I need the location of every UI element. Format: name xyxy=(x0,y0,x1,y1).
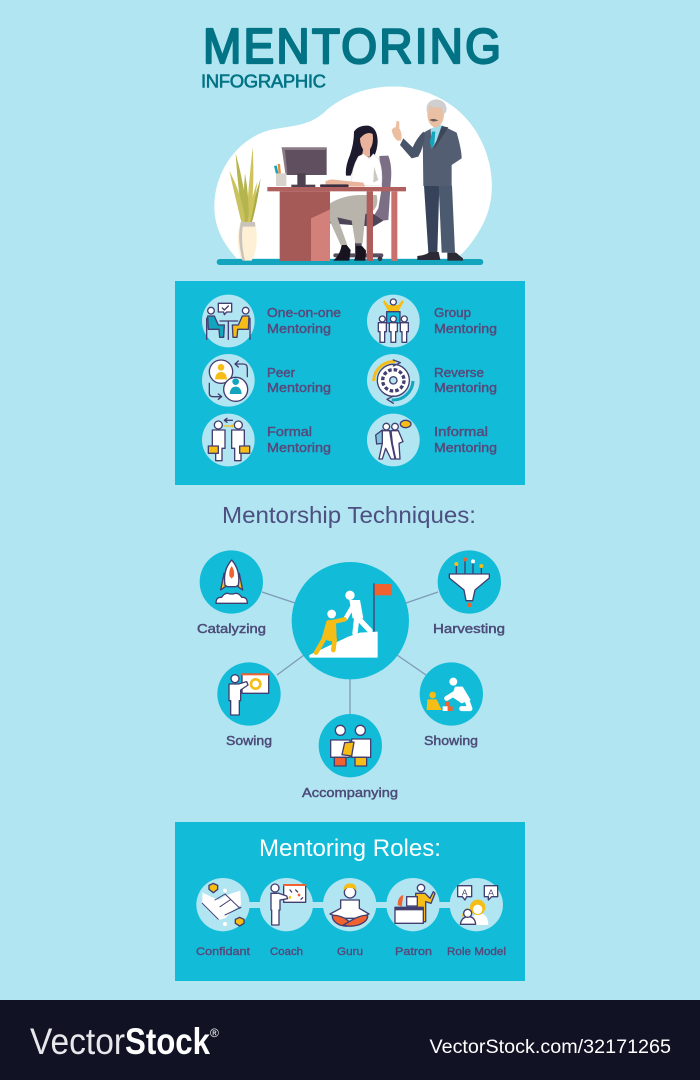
panel background xyxy=(175,822,525,981)
icon: one-on-one xyxy=(202,295,255,347)
connector lines xyxy=(262,592,438,714)
hero illustration: mentor and mentee at desk xyxy=(214,86,492,265)
panel: mentoring roles xyxy=(175,822,525,981)
icon: confidant handshake xyxy=(196,878,250,931)
icon: harvesting funnel xyxy=(438,550,501,614)
brand logo: Stock: Stock xyxy=(125,1021,210,1062)
label: one-on-one: One-on-one xyxy=(267,305,341,320)
white blob backdrop xyxy=(214,86,492,258)
mentor man standing xyxy=(392,99,463,261)
brand logo: Vector: Vector xyxy=(30,1021,125,1062)
icons group xyxy=(202,295,420,466)
label: harvesting: Harvesting xyxy=(433,621,505,636)
label: group: Mentoring xyxy=(434,321,497,336)
label: catalyzing: Catalyzing xyxy=(197,621,266,636)
panel background xyxy=(175,281,525,485)
label: one-on-one: Mentoring xyxy=(267,321,331,336)
panel: mentoring types xyxy=(175,281,525,485)
label: formal: Mentoring xyxy=(267,440,331,455)
footer bar xyxy=(0,1000,700,1080)
desk xyxy=(267,187,406,261)
icon: role model xyxy=(450,878,503,931)
label: informal: Mentoring xyxy=(434,440,497,455)
icon: accompanying xyxy=(319,714,382,777)
icon: coach xyxy=(260,878,313,931)
label: confidant: Confidant xyxy=(196,946,250,958)
label: sowing: Sowing xyxy=(226,733,272,748)
label: reverse: Reverse xyxy=(434,365,484,380)
ground line xyxy=(217,259,483,265)
icon: catalyzing rocket xyxy=(200,550,263,614)
label: patron: Patron xyxy=(395,946,432,958)
icon: peer xyxy=(202,354,255,407)
potted plant xyxy=(229,147,261,261)
label: informal: Informal xyxy=(434,424,488,439)
label: guru: Guru xyxy=(337,946,363,958)
title: MENTORING xyxy=(203,20,503,74)
connector bar xyxy=(223,902,477,908)
label: formal: Formal xyxy=(267,424,312,439)
icon: informal xyxy=(367,414,420,466)
label: peer: Mentoring xyxy=(267,380,331,395)
hub diagram: techniques xyxy=(197,550,505,800)
footer background xyxy=(0,1000,700,1080)
heading: mentorship techniques: Mentorship Techniques: xyxy=(222,502,476,528)
icon: sowing xyxy=(217,662,281,726)
icon: formal xyxy=(202,414,255,466)
label: reverse: Mentoring xyxy=(434,380,497,395)
icon: role model: A xyxy=(488,887,494,897)
icon: patron xyxy=(386,878,440,931)
label: showing: Showing xyxy=(424,733,478,748)
subtitle: INFOGRAPHIC xyxy=(201,70,326,92)
icon: showing xyxy=(420,662,483,726)
icon: reverse xyxy=(367,354,420,407)
heading: mentoring roles: Mentoring Roles: xyxy=(259,835,441,862)
registered mark: ® xyxy=(210,1026,219,1040)
label: coach: Coach xyxy=(270,946,303,958)
icon: role model: A xyxy=(462,887,468,897)
icon: guru xyxy=(323,878,376,931)
label: role model: Role Model xyxy=(447,946,506,958)
icon: group xyxy=(367,295,420,347)
woman seated xyxy=(320,126,382,261)
label: group: Group xyxy=(434,305,471,320)
office chair xyxy=(327,156,391,261)
computer monitor xyxy=(282,147,327,187)
label: peer: Peer xyxy=(267,365,296,380)
label: accompanying: Accompanying xyxy=(302,785,398,800)
pencil cup xyxy=(274,164,286,186)
icon: central climbers xyxy=(292,562,409,679)
image id: VectorStock.com/32171265 xyxy=(430,1037,671,1058)
